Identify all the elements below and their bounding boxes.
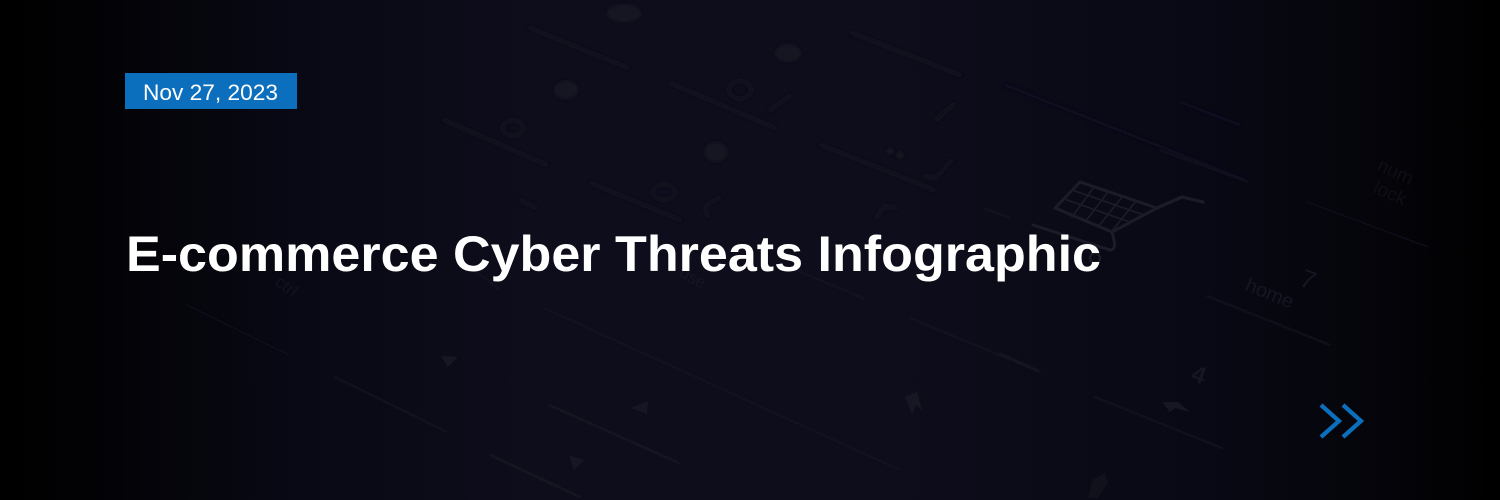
keyboard key outlines, lower area	[187, 150, 1428, 497]
icon: shopping cart	[1033, 182, 1203, 263]
key labels	[272, 155, 1416, 390]
key labels: 4	[1188, 360, 1210, 390]
icon: double chevron arrow	[1321, 405, 1361, 437]
date badge: Nov 27, 2023	[143, 80, 278, 105]
blurred keyboard key marks, upper area	[444, 4, 1245, 220]
key labels: ctrl	[272, 272, 301, 301]
key labels: 7	[1296, 263, 1320, 296]
key labels: use	[676, 263, 709, 292]
key labels: lock	[1370, 177, 1410, 211]
key labels: num	[1374, 155, 1416, 190]
key legends: arrows and numbers	[441, 356, 1190, 498]
date badge	[125, 73, 297, 109]
title: E-commerce Cyber Threats Infographic	[126, 226, 1101, 282]
key labels: home	[1242, 274, 1297, 313]
